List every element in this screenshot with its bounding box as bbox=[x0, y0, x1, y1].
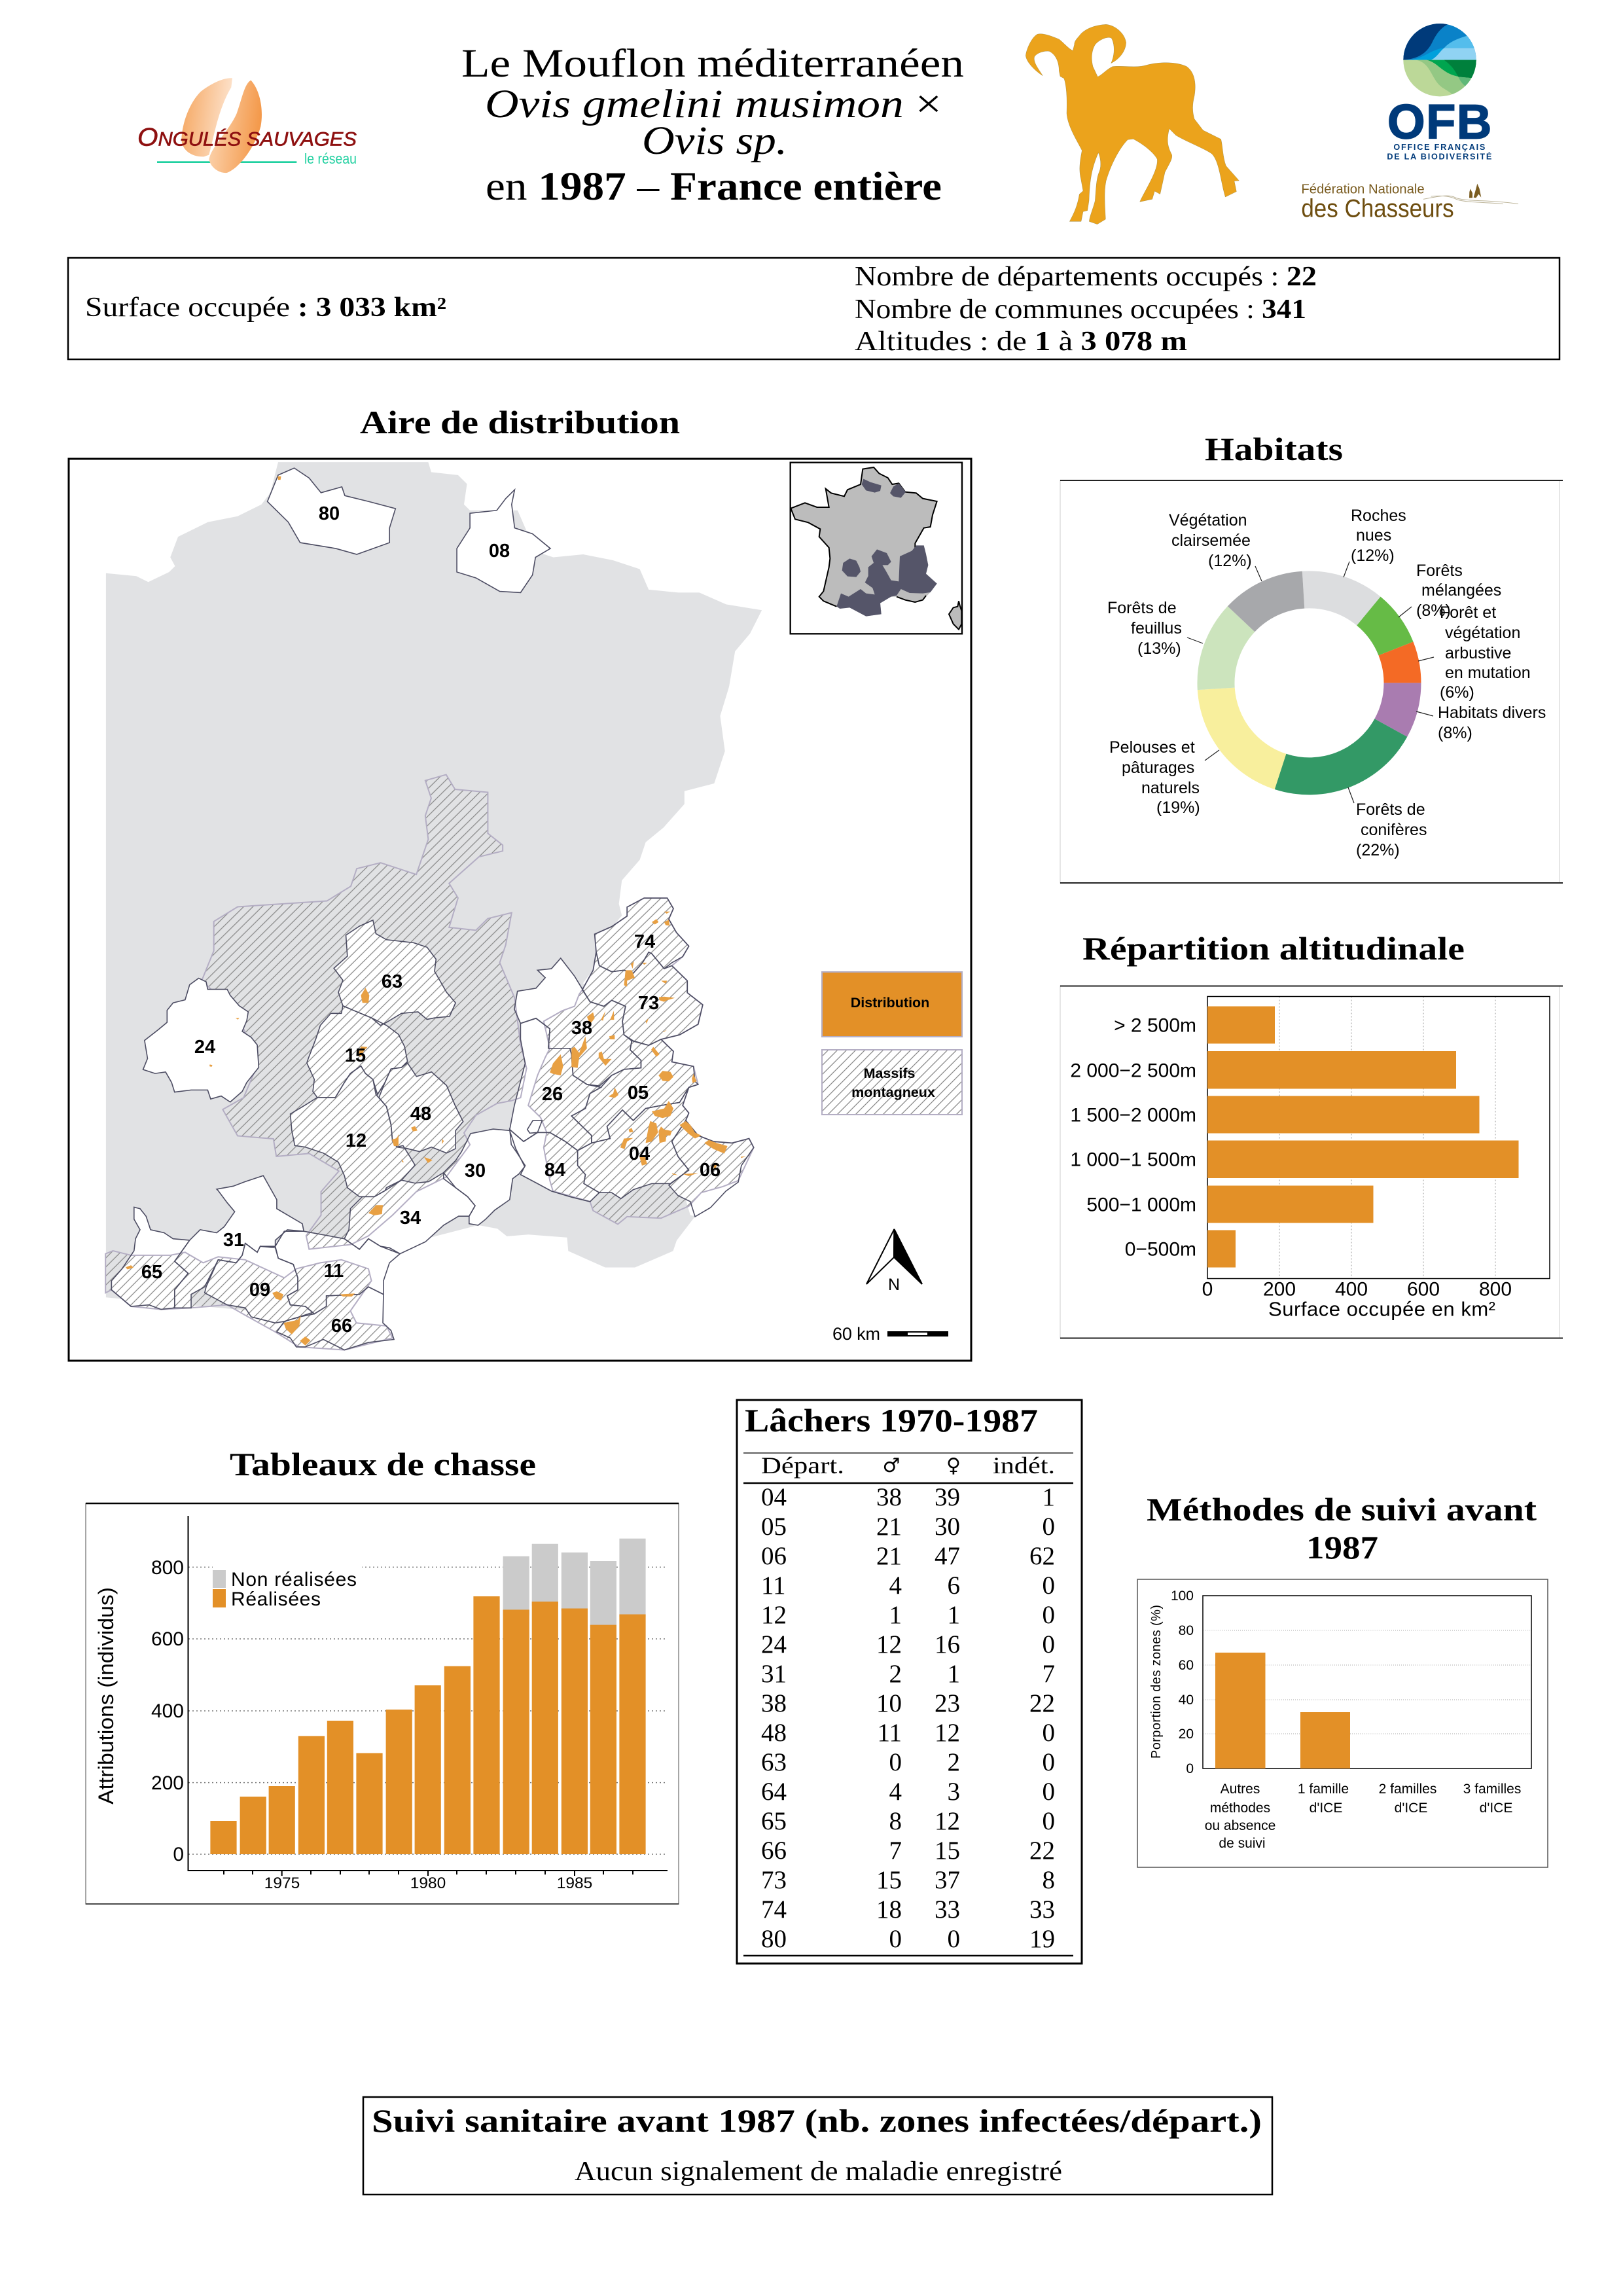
map: department labels: 06 bbox=[700, 1160, 721, 1181]
table: male column: 21 bbox=[876, 1542, 902, 1570]
table: undetermined column: 0 bbox=[1042, 1601, 1055, 1629]
panel: habitats donut chart bbox=[1060, 480, 1563, 883]
methods: plot frame bbox=[1203, 1596, 1531, 1768]
table: female column: 0 bbox=[948, 1925, 960, 1953]
hunting: x tick labels: 1985 bbox=[557, 1874, 592, 1892]
map: department labels: 84 bbox=[544, 1160, 565, 1181]
table: female column: 6 bbox=[948, 1571, 960, 1600]
table: undetermined column: 7 bbox=[1042, 1660, 1055, 1688]
table: male column: 4 bbox=[889, 1571, 902, 1600]
table: undetermined column bbox=[1029, 1483, 1055, 1953]
map: department labels: 74 bbox=[634, 931, 655, 952]
altitude: category labels: 500−1 000m bbox=[1086, 1194, 1196, 1216]
donut: labels: Habitats divers bbox=[1438, 704, 1546, 722]
donut: labels: Forêts bbox=[1416, 562, 1463, 580]
map: department labels: 04 bbox=[629, 1143, 650, 1164]
donut: slices bbox=[1197, 571, 1421, 795]
title: Ovis gmelini musimon × bbox=[485, 82, 942, 126]
table: department column: 64 bbox=[761, 1778, 787, 1806]
logo: Ongulés sauvages bbox=[137, 78, 357, 173]
heading: Habitats: Habitats bbox=[1205, 431, 1343, 467]
table: male column: 21 bbox=[876, 1513, 902, 1541]
donut: labels: Forêt et bbox=[1440, 603, 1496, 622]
map: department labels: 26 bbox=[542, 1084, 563, 1105]
donut: labels: Végétation bbox=[1169, 511, 1247, 529]
table: department column: 31 bbox=[761, 1660, 787, 1688]
table: department column: 05 bbox=[761, 1513, 787, 1541]
donut: labels: arbustive bbox=[1445, 644, 1511, 662]
donut: labels: Roches bbox=[1351, 507, 1406, 525]
table: female column: 47 bbox=[935, 1542, 960, 1570]
table: undetermined column: 0 bbox=[1042, 1719, 1055, 1747]
table: undetermined column: 33 bbox=[1029, 1895, 1055, 1924]
table: female column: 23 bbox=[935, 1689, 960, 1717]
table: male column: 0 bbox=[889, 1925, 902, 1953]
heading: Méthodes de suivi avant 1987: Méthodes de suivi avant bbox=[1147, 1491, 1537, 1528]
donut: labels bbox=[1107, 507, 1546, 859]
table: male column: 2 bbox=[889, 1660, 902, 1688]
table: female column: 1 bbox=[948, 1601, 960, 1629]
icon: north arrow: N bbox=[888, 1276, 900, 1294]
panel: key figures bbox=[68, 258, 1560, 359]
text: departments count: Nombre de départements occupés : 22 bbox=[855, 262, 1317, 292]
legend: distribution bbox=[822, 972, 962, 1037]
hunting: axes and ticks bbox=[188, 1516, 668, 1876]
logo: OFB: OFFICE FRANÇAIS bbox=[1393, 143, 1485, 152]
legend: massifs montagneux: Massifs bbox=[864, 1066, 915, 1081]
altitude: axis tick labels: 0 bbox=[1202, 1279, 1213, 1300]
donut: labels: pâturages bbox=[1122, 759, 1194, 777]
altitude: category labels: 1 500−2 000m bbox=[1070, 1105, 1196, 1126]
map: department labels: 09 bbox=[249, 1280, 270, 1300]
map: department labels bbox=[141, 503, 721, 1336]
table: undetermined column: 0 bbox=[1042, 1513, 1055, 1541]
panel: monitoring methods bar chart bbox=[1137, 1579, 1548, 1867]
altitude: bars bbox=[1207, 1007, 1518, 1267]
heading: Méthodes de suivi avant 1987 bbox=[1147, 1491, 1537, 1566]
hunting: y tick labels: 800 bbox=[151, 1557, 184, 1579]
methods: category labels: d'ICE bbox=[1480, 1801, 1512, 1816]
donut: labels: (12%) bbox=[1208, 552, 1252, 570]
donut: leader lines bbox=[1187, 562, 1434, 803]
hunting: y axis title: Attributions (individus) bbox=[94, 1587, 118, 1804]
map: department labels: 11 bbox=[324, 1261, 344, 1282]
panel: altitude bar chart bbox=[1060, 986, 1563, 1338]
donut: labels: (19%) bbox=[1156, 798, 1200, 817]
hunting: y tick labels: 600 bbox=[151, 1628, 184, 1650]
icon: north arrow bbox=[866, 1229, 922, 1294]
methods: gridlines bbox=[1203, 1630, 1531, 1734]
table: department column: 06 bbox=[761, 1542, 787, 1570]
methods: y axis title: Porportion des zones (%) bbox=[1149, 1605, 1164, 1759]
map: department labels: 38 bbox=[571, 1018, 592, 1039]
table: rules bbox=[743, 1452, 1073, 1454]
legend: massifs montagneux bbox=[822, 1050, 962, 1115]
methods: y tick labels: 100 bbox=[1171, 1588, 1194, 1604]
altitude: category labels bbox=[1070, 1014, 1196, 1261]
table: undetermined column: 1 bbox=[1042, 1483, 1055, 1511]
donut: labels: Forêts de bbox=[1107, 599, 1177, 617]
table: undetermined column: 62 bbox=[1029, 1542, 1055, 1570]
table: undetermined column: 0 bbox=[1042, 1571, 1055, 1600]
table: male column: 0 bbox=[889, 1748, 902, 1776]
table: female column: 3 bbox=[948, 1778, 960, 1806]
hunting: y tick labels: 0 bbox=[173, 1844, 184, 1865]
logo: Fédération Nationale des Chasseurs: des Chasseurs bbox=[1301, 194, 1454, 223]
table: header row: ♀ bbox=[946, 1454, 961, 1477]
altitude: category labels: 0−500m bbox=[1125, 1238, 1196, 1261]
logo: Fédération Nationale des Chasseurs bbox=[1301, 182, 1518, 223]
health monitoring: text: Aucun signalement de maladie enregistré bbox=[575, 2157, 1062, 2187]
map: Dordogne stays white bbox=[143, 978, 259, 1102]
map: department labels: 48 bbox=[410, 1103, 431, 1124]
table: undetermined column: 22 bbox=[1029, 1689, 1055, 1717]
map: department outlines bbox=[111, 468, 754, 1350]
donut: labels: feuillus bbox=[1131, 619, 1182, 637]
icon: mouflon silhouette bbox=[1026, 24, 1239, 224]
methods: category labels: 1 famille bbox=[1298, 1782, 1349, 1797]
altitude: plot frame and gridlines bbox=[1207, 996, 1550, 1279]
table: department column: 74 bbox=[761, 1895, 787, 1924]
altitude: axis tick labels: 200 bbox=[1263, 1279, 1296, 1300]
panel: distribution map bbox=[69, 459, 971, 1361]
altitude: axis tick labels: 600 bbox=[1407, 1279, 1440, 1300]
table: male column: 7 bbox=[889, 1837, 902, 1865]
map: massifs montagneux hatching bbox=[105, 775, 754, 1350]
altitude: axis tick labels bbox=[1202, 1279, 1512, 1300]
map: department labels: 73 bbox=[638, 993, 659, 1014]
table: department column: 66 bbox=[761, 1837, 787, 1865]
logo: OFB: OFB bbox=[1387, 95, 1491, 149]
table: department column: 73 bbox=[761, 1866, 787, 1894]
hunting: y tick labels bbox=[151, 1557, 184, 1865]
map: department labels: 80 bbox=[319, 503, 340, 524]
methods: y tick labels: 80 bbox=[1179, 1623, 1194, 1638]
map: department labels: 30 bbox=[465, 1160, 486, 1181]
panel: releases table bbox=[737, 1400, 1082, 1964]
title bbox=[461, 42, 964, 209]
panel: hunting bar chart bbox=[86, 1503, 679, 1904]
methods: category labels: Autres bbox=[1221, 1782, 1260, 1797]
table: female column: 15 bbox=[935, 1837, 960, 1865]
methods: y tick labels: 40 bbox=[1179, 1693, 1194, 1708]
logo: Ongulés sauvages: ONGULÉS SAUVAGES bbox=[137, 123, 357, 152]
text: altitudes: Altitudes : de 1 à 3 078 m bbox=[855, 327, 1187, 357]
table: female column bbox=[935, 1483, 960, 1953]
map: department labels: 34 bbox=[400, 1208, 421, 1229]
methods: y tick labels: 0 bbox=[1186, 1761, 1194, 1776]
table: undetermined column: 19 bbox=[1029, 1925, 1055, 1953]
methods: category labels bbox=[1205, 1782, 1521, 1851]
donut: labels: nues bbox=[1356, 526, 1391, 545]
heading: Aire de distribution: Aire de distribution bbox=[360, 404, 680, 440]
map: department labels: 12 bbox=[346, 1130, 366, 1151]
table: department column: 24 bbox=[761, 1630, 787, 1659]
map: department labels: 05 bbox=[628, 1083, 649, 1103]
hunting: realised bars bbox=[210, 1596, 646, 1854]
table: header row bbox=[761, 1452, 1055, 1479]
map: department labels: 65 bbox=[141, 1262, 162, 1283]
hunting: x tick labels bbox=[264, 1874, 592, 1892]
heading: Méthodes de suivi avant 1987: 1987 bbox=[1306, 1529, 1378, 1566]
map: department labels: 08 bbox=[489, 541, 510, 562]
methods: category labels: d'ICE bbox=[1310, 1801, 1342, 1816]
logo: OFB: DE LA BIODIVERSITÉ bbox=[1387, 151, 1491, 161]
hunting: x tick labels: 1975 bbox=[264, 1874, 300, 1892]
altitude: category labels: 1 000−1 500m bbox=[1070, 1149, 1196, 1170]
hunting: gridlines bbox=[188, 1567, 668, 1854]
donut: labels: mélangées bbox=[1421, 581, 1501, 600]
map: department labels: 15 bbox=[345, 1045, 366, 1066]
scale bar: 60 km bbox=[832, 1324, 880, 1344]
table: department column: 48 bbox=[761, 1719, 787, 1747]
logo: OFB bbox=[1387, 23, 1491, 161]
table: department column bbox=[761, 1483, 787, 1953]
donut: labels: conifères bbox=[1361, 821, 1427, 839]
map: white departments bbox=[111, 898, 754, 1350]
table: male column: 18 bbox=[876, 1895, 902, 1924]
table: female column: 37 bbox=[935, 1866, 960, 1894]
table: header row: ♂ bbox=[883, 1454, 900, 1477]
methods: y tick labels: 20 bbox=[1179, 1727, 1194, 1742]
table: male column: 38 bbox=[876, 1483, 902, 1511]
table: male column: 10 bbox=[876, 1689, 902, 1717]
donut: labels: végétation bbox=[1445, 624, 1520, 642]
title: Le Mouflon méditerranéen bbox=[461, 42, 964, 86]
map: France background bbox=[106, 462, 762, 1315]
donut: labels: Forêts de bbox=[1356, 800, 1425, 819]
table: female column: 2 bbox=[948, 1748, 960, 1776]
table: female column: 12 bbox=[935, 1719, 960, 1747]
table: undetermined column: 0 bbox=[1042, 1748, 1055, 1776]
donut: labels: en mutation bbox=[1445, 664, 1531, 682]
map: distribution patches bbox=[126, 476, 746, 1346]
donut: labels: (13%) bbox=[1137, 639, 1181, 658]
methods: category labels: 2 familles bbox=[1379, 1782, 1436, 1797]
table: male column: 12 bbox=[876, 1630, 902, 1659]
table: department column: 80 bbox=[761, 1925, 787, 1953]
hunting: non-realised bars bbox=[503, 1539, 646, 1628]
table: undetermined column: 0 bbox=[1042, 1807, 1055, 1835]
methods: category labels: d'ICE bbox=[1395, 1801, 1427, 1816]
donut: labels: (12%) bbox=[1351, 547, 1395, 565]
methods: bars bbox=[1215, 1653, 1350, 1768]
scale bar bbox=[832, 1324, 948, 1344]
altitude: category labels: > 2 500m bbox=[1114, 1014, 1196, 1037]
table: male column: 1 bbox=[889, 1601, 902, 1629]
table: department column: 12 bbox=[761, 1601, 787, 1629]
donut: labels: (6%) bbox=[1440, 683, 1474, 702]
table: undetermined column: 0 bbox=[1042, 1630, 1055, 1659]
hunting: x tick labels: 1980 bbox=[410, 1874, 446, 1892]
table: header row: Départ. bbox=[761, 1452, 844, 1479]
logo: Ongulés sauvages: le réseau bbox=[304, 151, 357, 167]
table: male column: 11 bbox=[877, 1719, 902, 1747]
donut: labels: (8%) bbox=[1416, 601, 1451, 620]
heading: Tableaux de chasse: Tableaux de chasse bbox=[230, 1446, 536, 1482]
heading: Répartition altitudinale: Répartition altitudinale bbox=[1082, 930, 1465, 967]
methods: category labels: ou absence bbox=[1205, 1818, 1275, 1833]
table: female column: 30 bbox=[935, 1513, 960, 1541]
legend: massifs montagneux: montagneux bbox=[851, 1085, 935, 1100]
table: department column: 38 bbox=[761, 1689, 787, 1717]
table: female column: 33 bbox=[935, 1895, 960, 1924]
table: department column: 63 bbox=[761, 1748, 787, 1776]
table: undetermined column: 22 bbox=[1029, 1837, 1055, 1865]
methods: category labels: méthodes bbox=[1210, 1801, 1270, 1816]
legend: distribution: Distribution bbox=[851, 995, 929, 1011]
altitude: category labels: 2 000−2 500m bbox=[1070, 1060, 1196, 1081]
altitude: axis tick labels: 400 bbox=[1335, 1279, 1368, 1300]
donut: labels: Pelouses et bbox=[1109, 738, 1195, 757]
methods: category labels: 3 familles bbox=[1463, 1782, 1521, 1797]
methods: category labels: de suivi bbox=[1219, 1836, 1266, 1851]
logo: Fédération Nationale des Chasseurs: Fédération Nationale bbox=[1301, 182, 1425, 197]
health monitoring: heading: Suivi sanitaire avant 1987 (nb. zones infectées/départ.) bbox=[372, 2102, 1262, 2139]
hunting: legend: Non réalisées bbox=[231, 1569, 357, 1590]
map: department labels: 63 bbox=[382, 971, 402, 992]
methods: y tick labels bbox=[1171, 1588, 1194, 1776]
methods: y tick labels: 60 bbox=[1179, 1658, 1194, 1673]
table: department column: 04 bbox=[761, 1483, 787, 1511]
table: female column: 16 bbox=[935, 1630, 960, 1659]
altitude: axis tick labels: 800 bbox=[1479, 1279, 1512, 1300]
altitude: axis title: Surface occupée en km² bbox=[1268, 1297, 1495, 1321]
hunting: y tick labels: 200 bbox=[151, 1772, 184, 1794]
donut: labels: (8%) bbox=[1438, 724, 1472, 742]
map: department labels: 24 bbox=[194, 1037, 215, 1058]
table: male column: 4 bbox=[889, 1778, 902, 1806]
inset: France locator map bbox=[791, 463, 962, 634]
table: undetermined column: 8 bbox=[1042, 1866, 1055, 1894]
table: heading: Lâchers 1970-1987 bbox=[745, 1402, 1038, 1439]
table: male column: 15 bbox=[876, 1866, 902, 1894]
donut: labels: naturels bbox=[1141, 779, 1200, 797]
table: female column: 39 bbox=[935, 1483, 960, 1511]
table: male column bbox=[876, 1483, 902, 1953]
table: female column: 1 bbox=[948, 1660, 960, 1688]
title: Ovis sp. bbox=[642, 119, 787, 163]
hunting: y tick labels: 400 bbox=[151, 1700, 184, 1722]
map: department labels: 31 bbox=[223, 1230, 244, 1251]
title: en 1987 – France entière bbox=[486, 165, 942, 209]
donut: labels: (22%) bbox=[1356, 841, 1400, 859]
text: occupied area: Surface occupée : 3 033 km² bbox=[85, 293, 446, 323]
donut: labels: clairsemée bbox=[1171, 531, 1251, 550]
table: male column: 8 bbox=[889, 1807, 902, 1835]
table: header row: indét. bbox=[993, 1452, 1055, 1479]
table: undetermined column: 0 bbox=[1042, 1778, 1055, 1806]
hunting: legend bbox=[213, 1562, 362, 1610]
table: department column: 65 bbox=[761, 1807, 787, 1835]
panel: health monitoring bbox=[363, 2097, 1272, 2195]
text: communes count: Nombre de communes occupées : 341 bbox=[855, 295, 1306, 325]
table: female column: 12 bbox=[935, 1807, 960, 1835]
map: department labels: 66 bbox=[331, 1316, 352, 1336]
hunting: legend: Réalisées bbox=[231, 1588, 321, 1610]
table: department column: 11 bbox=[761, 1571, 786, 1600]
